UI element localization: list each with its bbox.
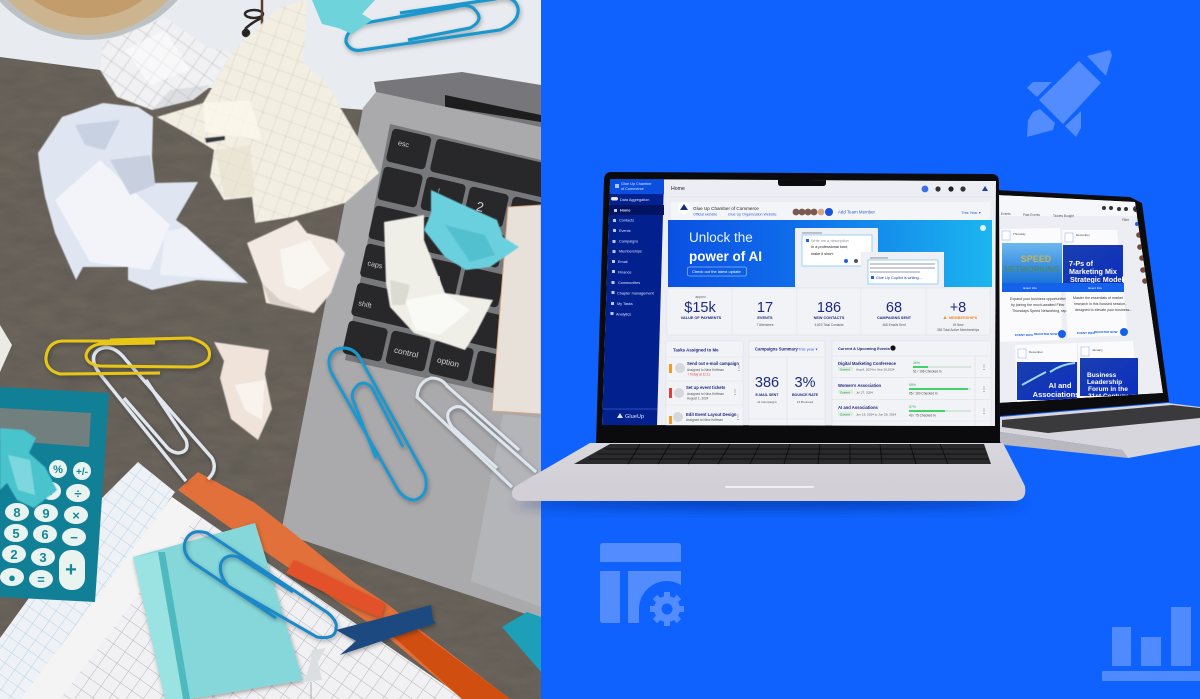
event row 1: Current — [840, 367, 850, 371]
laptop lid — [374, 72, 541, 127]
teal box corner — [502, 612, 541, 672]
rear laptop base — [1000, 403, 1200, 458]
laptop: rear, events page — [995, 190, 1200, 458]
panel: tasks assigned: Tasks Assigned to Me — [673, 348, 719, 352]
teal calculator: 8 — [13, 505, 21, 520]
teal calculator — [0, 387, 109, 602]
event card: 7-Ps: REGISTER NOW — [1094, 330, 1118, 334]
blue clip: top right — [346, 0, 518, 50]
laptop keyboard: option — [436, 356, 460, 370]
event card: business leadership: Forum in the — [1088, 386, 1128, 393]
crumpled cream tissue — [247, 220, 345, 313]
event card: speed networking: NETWORKING — [1004, 265, 1060, 274]
KPI row: 7 Attendees — [757, 323, 774, 327]
coffee cup — [0, 0, 178, 40]
task 2: ⋮ — [732, 390, 738, 396]
task 3 — [669, 412, 741, 424]
organization row: Official website — [693, 212, 717, 216]
laptop bezel — [596, 172, 1000, 443]
wooden desk surface — [0, 0, 541, 699]
sidebar: of Commerce — [621, 187, 644, 191]
event card: speed networking: Thursdays Speed Networking, rapi... — [1012, 309, 1070, 313]
laptop keyboard: esc — [397, 139, 410, 149]
rear laptop screen — [999, 195, 1163, 403]
event row 3: 57% — [909, 405, 916, 409]
KPI row: CAMPAIGNS SENT — [877, 316, 912, 320]
task 2: Assigned to Nina Hoffman — [687, 392, 724, 396]
navy clothespin — [336, 605, 436, 655]
teal calculator: 5 — [12, 526, 20, 541]
sidebar: Memberships — [619, 250, 642, 254]
teal calculator: % — [53, 464, 63, 476]
KPI row: 17 — [757, 300, 773, 316]
laptop keyboard: ! — [437, 187, 440, 195]
teal calculator: × — [72, 508, 80, 523]
rear laptop screen: Past Events — [1023, 213, 1040, 217]
panel: tasks assigned — [664, 341, 743, 426]
AI copilot card: In a professional tone, — [811, 245, 848, 249]
crumpled grid paper: top — [100, 17, 231, 110]
sidebar: Home — [620, 208, 631, 212]
event card: speed networking: by joining the much-awaited Filter — [1011, 303, 1065, 307]
task 1 — [669, 361, 742, 376]
event card: 7-Ps — [1062, 230, 1132, 338]
panel: campaigns summary — [749, 341, 825, 426]
top bar: Home — [671, 186, 685, 192]
event card: 7-Ps: December — [1076, 233, 1090, 237]
sidebar: Contacts — [619, 218, 634, 222]
KPI row: EVENTS — [757, 316, 773, 320]
KPI row: VALUE OF PAYMENTS — [681, 316, 722, 320]
panel: messy desk photo — [0, 0, 541, 699]
cyan crumple on calculator — [0, 428, 57, 508]
back-left grid notebook — [0, 462, 175, 699]
event card: business leadership: Business — [1087, 372, 1117, 379]
event card: 7-Ps: designed to elevate your business... — [1075, 308, 1132, 312]
rear laptop bezel — [995, 190, 1169, 416]
organization row: Glue Up Organization Website — [728, 212, 776, 216]
event row 2: 95% — [909, 383, 916, 387]
event card: AI and Associations: AI and — [1049, 381, 1072, 390]
cream notepad on laptop — [492, 205, 541, 414]
blue paper clip on laptop — [329, 348, 426, 500]
event card: business leadership — [1078, 341, 1138, 400]
sidebar: GlueUp — [625, 414, 644, 420]
teal calculator: +/- — [76, 467, 88, 478]
KPI row: 4,823 Total Contacts — [814, 323, 844, 327]
front grid notebook — [21, 497, 465, 699]
sidebar: Analytics — [616, 312, 631, 316]
laptop keyboard — [342, 124, 541, 393]
rear laptop screen: Tickets Bought — [1053, 214, 1074, 218]
organization row — [671, 202, 990, 220]
event card: AI and Associations: December — [1029, 350, 1043, 354]
KPI row: NEW CONTACTS — [814, 316, 845, 320]
icon: rocket — [1027, 50, 1112, 137]
AI banner — [668, 220, 992, 287]
rear laptop screen: Events — [1001, 212, 1011, 216]
rear laptop screen: Filter — [1122, 218, 1130, 222]
laptop keyboard: A — [433, 274, 443, 287]
AI banner: power of AI — [689, 249, 762, 264]
task 2: August 1, 2024 — [687, 396, 709, 400]
event card: 7-Ps: research in this focused session, — [1074, 302, 1126, 306]
panel: current and upcoming events: ⋮ — [981, 409, 987, 415]
event row 1 — [838, 361, 971, 374]
white paper clip on desk — [93, 348, 214, 481]
task 3: ⋮ — [735, 415, 741, 421]
teal calculator: 9 — [42, 506, 50, 521]
crumpled cream grid paper — [157, 0, 379, 223]
cream tissue: small — [214, 342, 272, 440]
teal calculator: − — [70, 530, 78, 545]
teal calculator: + — [65, 559, 77, 581]
event row 2 — [838, 383, 971, 396]
notebook spiral rings — [243, 0, 263, 36]
event row 1: Digital Marketing Conference — [838, 361, 897, 366]
push pin — [304, 648, 326, 699]
KPI row: approx. — [695, 295, 707, 299]
panel: current and upcoming events: Current & Upcoming Events — [838, 346, 890, 351]
event row 2: Jul 27, 2024 — [856, 390, 873, 394]
teal calculator: 6 — [41, 527, 49, 542]
event row 3: AI and Associations — [838, 405, 879, 410]
laptop screen — [602, 178, 996, 426]
white paper clip on laptop — [417, 378, 536, 487]
blue paper clip on sticky note — [184, 532, 336, 638]
panel: campaigns summary: E-MAIL SENT — [756, 393, 779, 397]
laptop keyboard: 1 — [434, 195, 440, 204]
event card: 7-Ps: EVENT INFO — [1077, 331, 1096, 335]
sidebar: Finance — [618, 270, 632, 274]
sidebar — [602, 179, 664, 426]
panel: campaigns summary: Campaigns Summary — [755, 346, 798, 352]
event card: speed networking: Event Info — [1023, 286, 1037, 290]
task 2 — [669, 385, 738, 400]
task 1: Send out e-mail campaign — [687, 361, 739, 366]
sidebar: My Tasks — [617, 302, 633, 306]
laptop keyboard: caps — [367, 259, 384, 271]
KPI row: MEMBERSHIPS — [949, 316, 978, 320]
cyan sticky note — [133, 523, 303, 699]
task 3: Assigned to Nina Hoffman — [686, 418, 723, 422]
top bar — [664, 178, 996, 197]
event row 2: Current — [840, 390, 850, 394]
task 3: Edit Event Layout Design — [686, 412, 737, 417]
KPI row: +8 — [950, 300, 966, 316]
event card: business leadership: January — [1092, 348, 1103, 352]
event row 1: Aug 8, 2024 to Sep 10,2024 — [856, 368, 895, 372]
organization row: This Year ▾ — [961, 210, 981, 215]
event row 2: Women's Association — [838, 383, 882, 388]
panel: campaigns summary: 13 Bounced — [797, 400, 814, 404]
teal calculator: + — [47, 484, 55, 499]
orange folder — [178, 472, 510, 699]
event row 3: Jun 19, 2024 to Jun 29, 2024 — [856, 412, 896, 416]
event card: 7-Ps: Master the essentials of market — [1073, 296, 1123, 300]
yellow paper clip — [46, 338, 210, 374]
laptop keyboard: 2 — [475, 199, 485, 215]
teal calculator: = — [37, 572, 45, 587]
teal calculator: 2 — [10, 547, 18, 562]
KPI row: 336 Total Active Memberships — [937, 328, 980, 332]
panel: current and upcoming events: ⋮ — [981, 365, 987, 371]
event row 1: 26% — [913, 361, 920, 365]
sidebar: Chapter management — [617, 292, 655, 296]
event card: business leadership: 21st Century — [1088, 393, 1128, 400]
event card: 7-Ps: 7-Ps of — [1069, 259, 1094, 268]
event row 3: 43 / 75 Checked In — [909, 414, 936, 418]
silver laptop body — [281, 92, 541, 619]
small white paper corner — [0, 325, 12, 372]
AI copilot card: Write me a description — [811, 239, 849, 243]
AI banner: Check out the latest update — [692, 269, 741, 274]
KPI row: 468 Emails Sent — [882, 323, 906, 327]
laptop: front, dashboard — [512, 172, 1025, 508]
crumpled white paper on keyboard — [384, 215, 493, 350]
laptop trackpad — [471, 414, 541, 607]
sidebar: Campaigns — [619, 240, 638, 244]
panel: blue background — [541, 0, 1200, 699]
sidebar: Email — [618, 260, 628, 264]
icon: bar chart — [1102, 607, 1200, 681]
cyan crumple on keyboard — [424, 190, 519, 270]
teal calculator: ÷ — [74, 486, 82, 501]
panel: campaigns summary: 386 — [755, 375, 779, 391]
laptop base — [512, 443, 1025, 501]
teal calculator: ● — [8, 570, 16, 585]
camera notch — [778, 178, 826, 186]
laptop keyboard: shift — [358, 299, 372, 310]
event card: AI and Associations: Associations — [1033, 390, 1079, 399]
task 1: ! Today at 11:11 — [688, 372, 710, 376]
sidebar: Data Aggregation — [620, 198, 649, 202]
panel: campaigns summary: 11 Campaigns — [757, 400, 777, 404]
organization row: Glue Up Chamber of Commerce — [693, 206, 759, 211]
task 1: ⋮ — [736, 366, 742, 372]
event row 3 — [838, 405, 971, 418]
event card: speed networking — [1000, 228, 1070, 342]
event card: 7-Ps: Strategic Model — [1070, 275, 1124, 284]
event row 3: Current — [840, 412, 850, 416]
event card: speed networking: Thursday — [1013, 232, 1026, 236]
sidebar: Communities — [618, 281, 640, 285]
AI writing card: Glue Up Copilot is writing... — [876, 276, 922, 280]
teal calculator: 3 — [39, 550, 47, 565]
sidebar: Glue Up Chamber — [621, 182, 652, 186]
KPI row: $15k — [684, 300, 716, 316]
laptop keyboard: control — [393, 346, 419, 360]
red clothespin — [286, 560, 385, 618]
event card: 7-Ps: Event Info — [1088, 286, 1102, 290]
black pen — [445, 95, 541, 122]
AI copilot card — [795, 228, 878, 287]
event card: speed networking: REGISTER NOW — [1034, 332, 1058, 336]
laptop shadow — [515, 498, 1025, 508]
laptop keyboard: # — [520, 211, 526, 219]
event card: 7-Ps: Marketing Mix — [1069, 267, 1117, 276]
icon: layout with gear — [600, 543, 687, 626]
event card: AI and Associations — [1015, 343, 1079, 403]
event card: speed networking: EVENT INFO — [1015, 333, 1034, 337]
KPI row: 15 New — [953, 323, 964, 327]
panel: campaigns summary: This year ▾ — [798, 346, 818, 352]
KPI row — [667, 288, 990, 335]
AI copilot card: make it short. — [811, 252, 834, 256]
panel: current and upcoming events: ⋮ — [981, 387, 987, 393]
organization row: Add Team Member — [838, 210, 876, 214]
event card: business leadership: Leadership — [1087, 379, 1122, 386]
crumpled blue-white paper — [38, 103, 248, 290]
panel: current and upcoming events — [832, 341, 991, 426]
panel: campaigns summary: 3% — [795, 375, 816, 391]
KPI row: 186 — [817, 300, 841, 316]
panel: campaigns summary: BOUNCE RATE — [792, 393, 819, 397]
sidebar: Events — [619, 229, 631, 233]
event row 2: 95 / 100 Checked In — [909, 392, 938, 396]
cyan crumple: top — [312, 0, 375, 34]
event card: speed networking: SPEED — [1021, 254, 1052, 264]
task 1: Assigned to Nina Hoffman — [687, 368, 724, 372]
task 2: Set up event tickets — [686, 385, 726, 390]
AI writing card — [861, 252, 944, 287]
KPI row: 68 — [886, 300, 902, 316]
AI banner: Unlock the — [689, 230, 753, 245]
event card: speed networking: Expand your business opportunities — [1010, 297, 1067, 301]
event row 1: 51 / 196 Checked In — [913, 370, 942, 374]
white paper sheet under the desk items — [0, 0, 541, 110]
